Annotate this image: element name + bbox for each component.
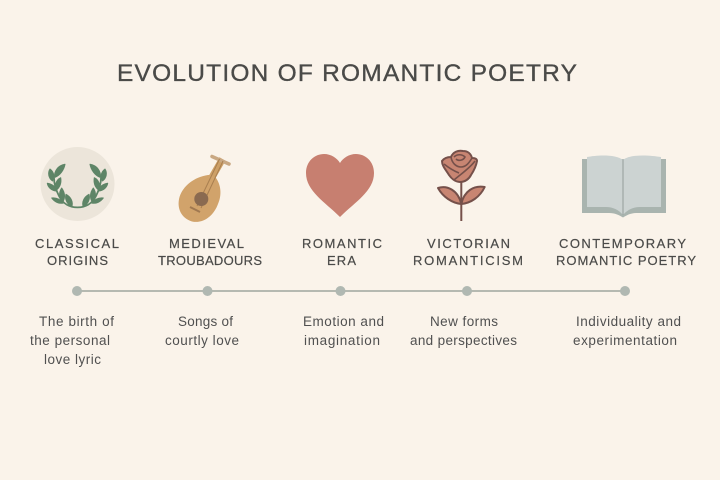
text: romantic description: imagination <box>304 333 380 348</box>
heading: classical origins: ORIGINS <box>47 253 108 268</box>
heading: romantic era <box>302 236 382 268</box>
text: medieval description <box>165 314 239 348</box>
text: victorian description: New forms <box>430 314 498 329</box>
icon: laurel wreath <box>40 147 114 221</box>
text: contemporary description: Individuality and <box>576 314 681 329</box>
text: classical description: The birth of <box>39 314 114 329</box>
icon: lute <box>179 156 229 222</box>
text: contemporary description: experimentation <box>573 333 677 348</box>
timeline node: contemporary <box>620 286 630 296</box>
text: medieval description: Songs of <box>178 314 233 329</box>
timeline <box>72 286 630 296</box>
icon: heart <box>306 154 374 217</box>
heading: victorian romanticism: VICTORIAN <box>427 236 510 251</box>
text: victorian description: and perspectives <box>410 333 517 348</box>
icon: open book <box>582 155 666 218</box>
text: contemporary description <box>573 314 681 348</box>
text: classical description: the personal <box>30 333 110 348</box>
heading: romantic era: ROMANTIC <box>302 236 382 251</box>
text: romantic description <box>303 314 384 348</box>
heading: medieval troubadours: MEDIEVAL <box>169 236 244 251</box>
heading: contemporary romantic poetry <box>556 236 696 268</box>
title: EVOLUTION OF ROMANTIC POETRY <box>117 60 577 87</box>
timeline node: classical <box>72 286 82 296</box>
text: romantic description: Emotion and <box>303 314 384 329</box>
heading: classical origins <box>35 236 119 268</box>
heading: victorian romanticism: ROMANTICISM <box>413 253 523 268</box>
heading: classical origins: CLASSICAL <box>35 236 119 251</box>
heading: victorian romanticism <box>413 236 523 268</box>
timeline node: medieval <box>202 286 212 296</box>
timeline node: romantic <box>336 286 346 296</box>
heading: contemporary romantic poetry: ROMANTIC POETRY <box>556 253 696 268</box>
heading: medieval troubadours: TROUBADOURS <box>158 253 262 268</box>
text: classical description <box>30 314 114 367</box>
text: medieval description: courtly love <box>165 333 239 348</box>
heading: contemporary romantic poetry: CONTEMPORARY <box>559 236 686 251</box>
heading: medieval troubadours <box>158 236 262 268</box>
timeline node: victorian <box>462 286 472 296</box>
text: victorian description <box>410 314 517 348</box>
heading: romantic era: ERA <box>327 253 356 268</box>
icon: rose <box>438 151 485 221</box>
text: classical description: love lyric <box>44 352 101 367</box>
